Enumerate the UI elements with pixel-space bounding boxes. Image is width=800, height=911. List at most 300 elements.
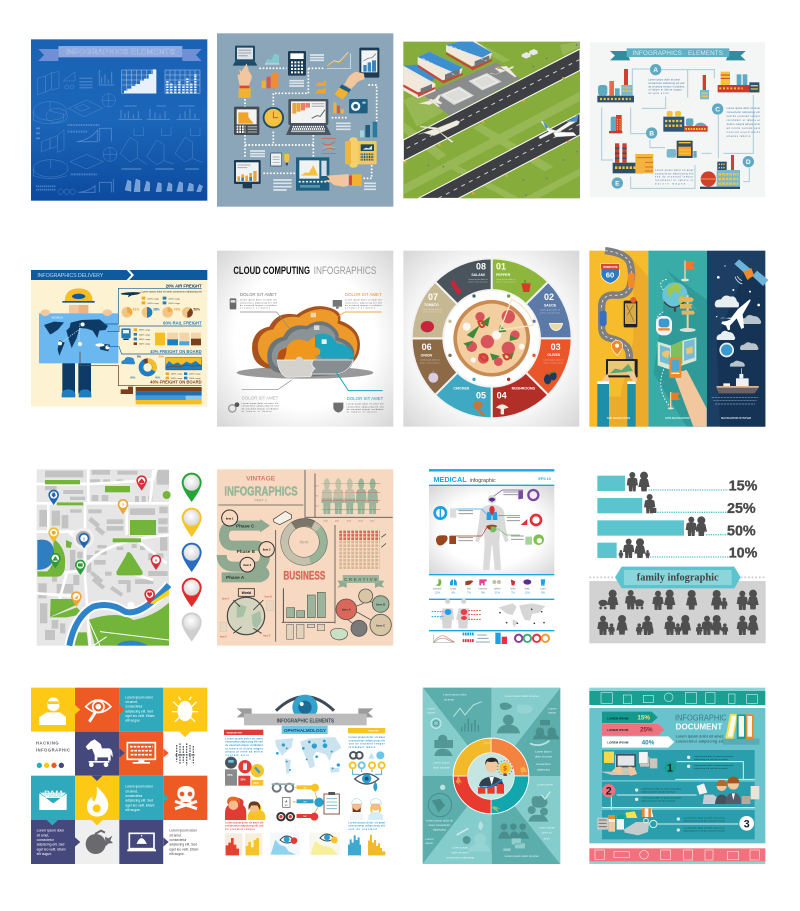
text blocks: sit amet, [37,833,49,837]
right column text: HEADLINE [368,730,379,733]
organs on body [486,498,497,532]
icon: clock [263,107,284,128]
icon: hooded hacker [39,697,66,725]
letter badges [612,64,754,189]
road shield sign: INTERSTATE [603,266,618,269]
title: CLOUD COMPUTING [233,265,310,277]
left column text: do eiusmod tempor incididunt [225,744,263,747]
segment labels: 04 [497,390,507,400]
wedge captions: adipiscing [537,768,550,772]
segment labels: SAUCE [544,304,557,308]
serpentine phases: Phase B [237,549,256,554]
doctors text: Lorem ipsum dolor sit amet [348,821,385,824]
wedge captions: Lorem ipsum dolor sit amet [505,694,539,698]
main field [589,708,765,843]
callout: top right: Lorem ipsum dolor sit amet elit [345,299,382,302]
left column text: ut labore et dolore magna [225,747,263,750]
wedge captions: sit amet [444,698,454,702]
flag bottom [668,392,680,409]
air freight: 70% [174,308,180,312]
compass [719,343,734,357]
central exam diagram: A [285,800,288,804]
callout: top right: do eiusmod tempor incididunt [345,304,382,307]
section rules [429,470,554,631]
text blocks: adipiscing elit. Sed [37,843,65,847]
globe and labels: Item A [222,597,229,600]
header band: INFOGRAPHICS DELIVERY [37,273,104,279]
panel: factory infographic [590,42,765,197]
right column text: sed do eiusmod tempor [349,743,385,746]
people height chart: 2014 [370,520,375,522]
white roads [37,469,169,646]
air freight: 20% AIR FREIGHT [166,284,202,289]
panel: city map with pins [37,469,171,646]
roundabout [73,528,94,549]
text blocks: adipiscing elit. Sed [125,799,153,803]
right column text: Lorem ipsum dolor sit amet [349,736,385,739]
people height chart [315,478,380,522]
icon: desk phone [345,137,377,168]
pizza [453,299,533,377]
central exam diagram: TEXT [303,801,307,803]
callout: top right: consectetur adipiscing elit sed [345,301,382,304]
step band 2: adipiscing elit sed do eiusmod [641,800,675,803]
blue and yellow bar charts [348,835,385,855]
lighter grass strips [403,42,580,198]
text blocks: consectetur [37,838,55,842]
segment labels [421,261,561,400]
factory centre [667,141,697,158]
organ row: 9% [481,591,486,595]
air freight: 100% cargo [168,302,181,305]
text blocks: Lorem ipsum dolor sit amet [727,107,760,110]
panel: pizza ingredients wheel [403,251,579,427]
dotted leaders [648,490,728,557]
text block on white: eget leo velit. Etiam [169,847,199,851]
left circles and bars [225,757,264,786]
wedge captions: consectetur [536,762,551,766]
freight on board donut and area chart: 100% cargo [189,373,201,376]
panel: blue-grey devices and hands [217,33,393,207]
serpentine phases: Item 3 [243,563,252,567]
pictogram grid [339,532,386,568]
road shield sign: 60 [606,271,614,280]
callout: top right: ut labore et dolore [345,307,376,310]
step band 3: adipiscing elit sed do eiusmod tempor [683,820,725,823]
left column text: HEADLINE TEXT [227,731,243,734]
title [433,475,551,484]
step band 2: Lorem ipsum dolor sit amet consectetur [641,797,682,800]
layered puzzle cloud [252,306,360,377]
segment body text: Lorem ipsum dolor sit [540,309,560,312]
wedge captions: consectetur adipiscing [446,855,474,859]
callout: top left: Lorem ipsum dolor sit amet elit [240,299,277,302]
patients [225,797,265,820]
text blocks: Lorem ipsum dolor sit amet [648,79,680,82]
wheel segments [412,258,572,418]
icon: bomb [86,831,113,854]
long shadows [597,260,648,427]
air freight: 41% [133,308,139,312]
text blocks: consectetur [125,705,143,709]
segment labels: 06 [422,342,432,352]
callout lines [240,312,292,389]
ship [712,368,759,404]
segment labels: 08 [476,261,486,271]
central ring [453,738,529,814]
pencil eraser [273,511,291,525]
rail freight: 100% cargo [139,343,151,346]
percent chevrons: 40% [642,740,655,747]
text blocks: Lorem ipsum dolor [125,785,154,789]
doctors text [348,821,385,831]
left circles and bars: 67% [227,773,233,777]
callout: bottom right [333,396,384,414]
serpentine phases: Item 2 [263,548,271,552]
left column text [224,730,263,757]
wedge captions: adipiscing [433,828,446,832]
step band 1 [600,750,755,780]
lower grey panel [589,581,766,643]
left column text: aliqua ut enim ad minim [225,751,263,754]
icon: notepad and bulb [271,153,289,166]
callout: top left: ut labore et dolore [240,307,271,310]
panel: business wheel [423,688,560,864]
segment labels: 03 [551,342,561,352]
clouds [715,295,761,367]
text blocks: Lorem ipsum dolor [125,695,154,699]
wedge captions [425,693,557,859]
central exam diagram: E F [285,805,289,807]
right eye diagram [350,751,385,792]
road freight bars: 40% FREIGHT ON BOARD [150,380,202,385]
clipboard [324,792,339,814]
organ row: 21% [495,591,501,595]
text blocks: elit augue. [125,808,141,812]
organ row: heart [510,587,516,590]
step band 1: adipiscing elit sed do eiusmod [694,767,728,770]
map dots [276,740,340,771]
text block on white: Lorem ipsum dolor [169,829,198,833]
globe and labels: World [242,591,251,595]
people height chart: 200 [315,496,319,498]
panel: infographic document [589,688,765,864]
text blocks [648,79,761,185]
organ row [433,579,546,595]
icon: desktop monitor [234,160,261,188]
family silhouettes [597,590,759,635]
segment labels: 01 [496,261,506,271]
ring chart: Item [300,539,309,544]
bubble labels: Item C [376,623,386,627]
factory D [700,155,740,189]
column captions: GPS NAVIGATION [665,416,689,420]
percentages: 10% [729,546,758,562]
segment labels: 02 [544,292,554,302]
air freight: 100% cargo [168,297,181,300]
organ row: 9% [541,591,546,595]
wedge captions: ipsum [426,841,434,845]
percentages: 15% [729,479,758,495]
segment body text: Lorem ipsum dolor sit [423,308,442,311]
segment labels: 07 [428,292,438,302]
icon: calculator [288,51,306,76]
title: INFOGRAPHICS [314,265,376,277]
percent chevrons: LOREM IPSUM [607,728,629,732]
dotted world map [275,737,342,774]
wedge captions: Lorem [425,837,434,841]
wedge captions: Lorem ipsum dolor sit amet [505,854,539,858]
binders [723,714,759,745]
text blocks: incididunt ut labore et [655,179,694,182]
connector lines [80,288,202,386]
text blocks: eget leo velit. Etiam [125,803,155,807]
wedge captions: Lorem ipsum [452,845,469,849]
percent chevrons: 25% [640,727,653,734]
doctors text: sed do eiusmod [348,829,377,831]
pin: blue [182,543,202,572]
text blocks: ullamco laboris [727,135,751,138]
panel: isometric airport [403,42,580,198]
icon: large laptop [286,99,331,135]
bubble labels: Item A [342,608,352,612]
step band 3: Lorem ipsum dolor sit amet consectetur [683,827,725,830]
column captions: TAB NAVIGATION [606,416,630,420]
patient text [225,821,264,831]
eye illustration [276,695,334,720]
segment body text: Lorem ipsum dolor sit [468,278,488,281]
segment labels: 05 [476,390,486,400]
freight on board donut and area chart: 8% [137,355,141,359]
segment labels: PEPPER [496,273,511,277]
freight on board donut and area chart: 100% cargo [189,377,201,380]
segment body text: Lorem ipsum dolor sit [543,359,564,362]
segment labels: CHICKEN [453,387,470,391]
organ row: 7% [467,591,472,595]
legend: coloured map pins [182,473,202,642]
people height chart: 2012 [347,520,351,522]
segment labels: ONION [421,354,433,358]
central exam diagram: TEXT [303,816,307,818]
icon: spam envelope [39,789,67,810]
map markers: ! [83,536,85,542]
text blocks: Lorem ipsum dolor [37,829,65,833]
left column text: Lorem ipsum dolor sit amet [225,737,263,740]
step band 1: 1 [667,763,673,775]
panel: hacking infographic [31,688,207,864]
storage tank icon [609,115,622,133]
title: VINTAGE [246,476,276,483]
text blocks: dolore magna aliqua enim [727,123,760,126]
factory A [597,69,634,102]
callout: top right [333,292,382,310]
organ row: intestine [479,587,488,590]
ribbon heading [610,48,746,60]
hand with gps phone [669,357,707,427]
freight on board donut and area chart: 100% cargo [171,377,183,380]
callout: top right: DOLOR SIT AMET [345,292,382,298]
segment labels: SALAMI [471,273,485,277]
ingredient pointers [448,294,536,381]
rail freight: 60% RAIL FREIGHT [163,321,202,326]
organ row: 7% [511,591,516,595]
icon: terminal device [234,107,259,135]
serpentine phases: Phase A [226,575,245,580]
text block on white: consectetur [169,838,187,842]
step band 3: adipiscing elit sed do eiusmod tempor [683,830,725,833]
ring chart [281,519,327,565]
freight on board donut and area chart: 40% FREIGHT ON BOARD [150,349,202,354]
wedge captions: dolor sit amet [433,766,450,770]
right column text: incididunt labore [349,746,376,749]
segment labels: TOMATO [424,303,439,307]
wedge captions: Lorem [427,706,436,710]
ribbon [337,575,384,588]
patient text: do eiusmod tempor [225,828,255,831]
callout: bottom left: consectetur adipiscing elit sed [242,405,278,408]
text blocks: consectetur adipiscing elit [655,172,694,175]
percent chevrons [602,712,674,748]
bars [597,476,684,558]
factory E [613,143,653,173]
factory B [663,111,708,132]
freight on board donut and area chart [121,349,202,380]
callout: bottom left: Lorem ipsum dolor sit amet elit [242,402,279,405]
text blocks: consectetur adipiscing elit [727,111,760,114]
letter badges: D [746,159,751,166]
rail freight: 100% cargo [139,333,151,336]
organ row: lungs [451,588,457,590]
text blocks: do eiusmod tempor incididunt [648,85,685,88]
businessman icon [478,758,512,794]
text blocks: dolore magna [655,182,686,185]
people height chart: 2013 [358,520,364,522]
pin: green [182,473,202,502]
runway markers [404,66,570,195]
wedge captions: Lorem ipsum [433,760,450,764]
globe and labels: Item C [220,635,227,638]
title: EPS 10 [538,477,551,481]
organ row: tooth [540,587,546,590]
banner [615,567,741,588]
human body [475,495,509,570]
central exam diagram [272,783,324,821]
icon: hacked monitor [127,743,155,764]
ribbon heading: INFOGRAPHIC ELEMENTS [277,718,334,724]
segment body text: Lorem ipsum dolor sit [496,278,516,281]
callout: top left: consectetur adipiscing elit sed [240,301,277,304]
text blocks: consectetur [125,794,143,798]
doctors [350,799,383,820]
organ row: spleen [494,588,501,590]
callout: bottom right: do eiusmod tempor incididunt [347,408,384,411]
bottom pink band [589,848,765,864]
step band 2 [602,777,759,810]
gps receiver [656,316,672,335]
factory top right [718,72,759,92]
text blocks: ut labore et dolore magna [648,89,682,92]
segment body text: amet consectetur [543,361,564,364]
runway two [418,113,580,198]
callout: bottom left: DOLOR SIT AMET [242,395,278,401]
doctors text: consectetur adipiscing elit [348,825,385,828]
freight on board donut and area chart: 40% [130,375,136,379]
text block on white: sit amet, [169,833,182,837]
text blocks: elit augue. [125,719,141,723]
text blocks: eget leo velit. Etiam [37,847,66,851]
text block on white: adipiscing elit. Sed [169,843,197,847]
people height chart: 2010 [323,520,329,522]
callout: bottom right: Lorem ipsum dolor sit amet elit [347,403,384,406]
text blocks: sed do eiusmod tempor [727,115,760,118]
text blocks: aliqua enim [648,93,668,95]
step band 2: Lorem ipsum dolor sit amet consectetur [641,788,682,791]
serpentine phases: Item 1 [226,516,234,520]
serpentine phases: Phase C [236,523,255,528]
top teal band [589,688,765,705]
wedge captions: dolor sit amet [452,850,469,854]
waffle bar charts [225,833,262,855]
text blocks: ad minim veniam quis [727,128,761,130]
text blocks: sit amet, [125,789,138,793]
pin: grey [182,612,202,642]
icon: bug [172,697,198,722]
bright mesh bar charts [122,69,200,93]
serpentine phases [222,510,274,580]
document heading: DOCUMENT [676,723,722,732]
globe and labels: Item B [265,595,272,598]
bar silhouettes [619,472,707,558]
callout: bottom right: ut labore et dolore [347,411,378,414]
callout: bottom left: ut labore et dolore [242,410,273,413]
air freight: 38% [153,308,160,312]
text blocks [37,695,155,856]
ribbon heading [237,708,373,734]
delivery man with map [39,288,118,397]
text blocks: sit amet, [125,700,138,704]
icon: ATM with hand [296,157,362,191]
globe and labels: Item D [263,635,271,638]
colour dots [37,763,64,768]
dotted connectors [245,68,377,178]
callout: bottom left [229,395,279,413]
vintage bar chart [283,588,348,640]
background wedges [423,688,560,864]
column captions: NAVIGATION SYSTEM [721,416,752,420]
map markers: ? [121,502,125,508]
step band 2: adipiscing elit sed do eiusmod [641,791,675,794]
percent chevrons: LOREM IPSUM [607,716,629,720]
title: infographic [470,478,496,484]
tile pointers [47,705,191,847]
text blocks: elit augue. [37,852,52,856]
organ row: 12% [435,591,441,595]
road shield sign [601,264,619,283]
title: INFOGRAPHICS [224,483,298,498]
panel: family infographic [589,472,766,643]
callout: bottom right: consectetur adipiscing elit sed [347,405,383,408]
airplanes [418,66,578,143]
left circles and bars: 25% [253,781,259,785]
wedge captions: ipsum [549,710,557,714]
text blocks: incididunt ut labore et [727,119,760,122]
river [69,585,169,646]
wedge captions: ipsum [428,710,436,714]
dashed trail [657,279,670,407]
percentages: 50% [727,523,756,539]
banner: family infographic [637,573,719,584]
right column text [348,728,385,749]
